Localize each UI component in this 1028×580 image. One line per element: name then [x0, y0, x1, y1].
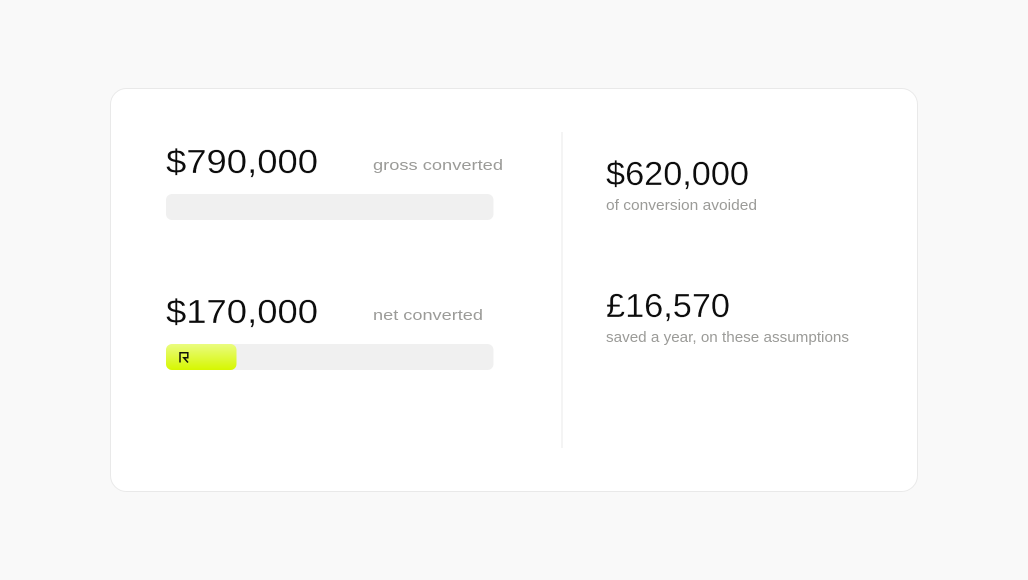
metric: conversion avoided	[606, 155, 757, 214]
panel: main card	[110, 88, 918, 492]
metric: net converted	[166, 293, 494, 370]
value: yearly saving amount: £16,570	[606, 287, 730, 324]
label: conversion avoided: of conversion avoided	[606, 197, 757, 214]
value: gross converted amount: $790,000	[166, 143, 318, 180]
label: yearly saving: saved a year, on these assumptions	[606, 329, 849, 346]
metric: gross converted	[166, 143, 503, 220]
metric: yearly saving	[606, 287, 849, 346]
bar: gross converted track	[166, 194, 494, 220]
value: net converted amount: $170,000	[166, 293, 318, 330]
bar: net converted track	[166, 344, 494, 370]
label: gross converted: gross converted	[373, 157, 503, 174]
value: conversion avoided amount: $620,000	[606, 155, 749, 192]
icon: R logo	[180, 353, 188, 362]
bar: net converted fill	[166, 344, 236, 370]
label: net converted: net converted	[373, 307, 483, 324]
